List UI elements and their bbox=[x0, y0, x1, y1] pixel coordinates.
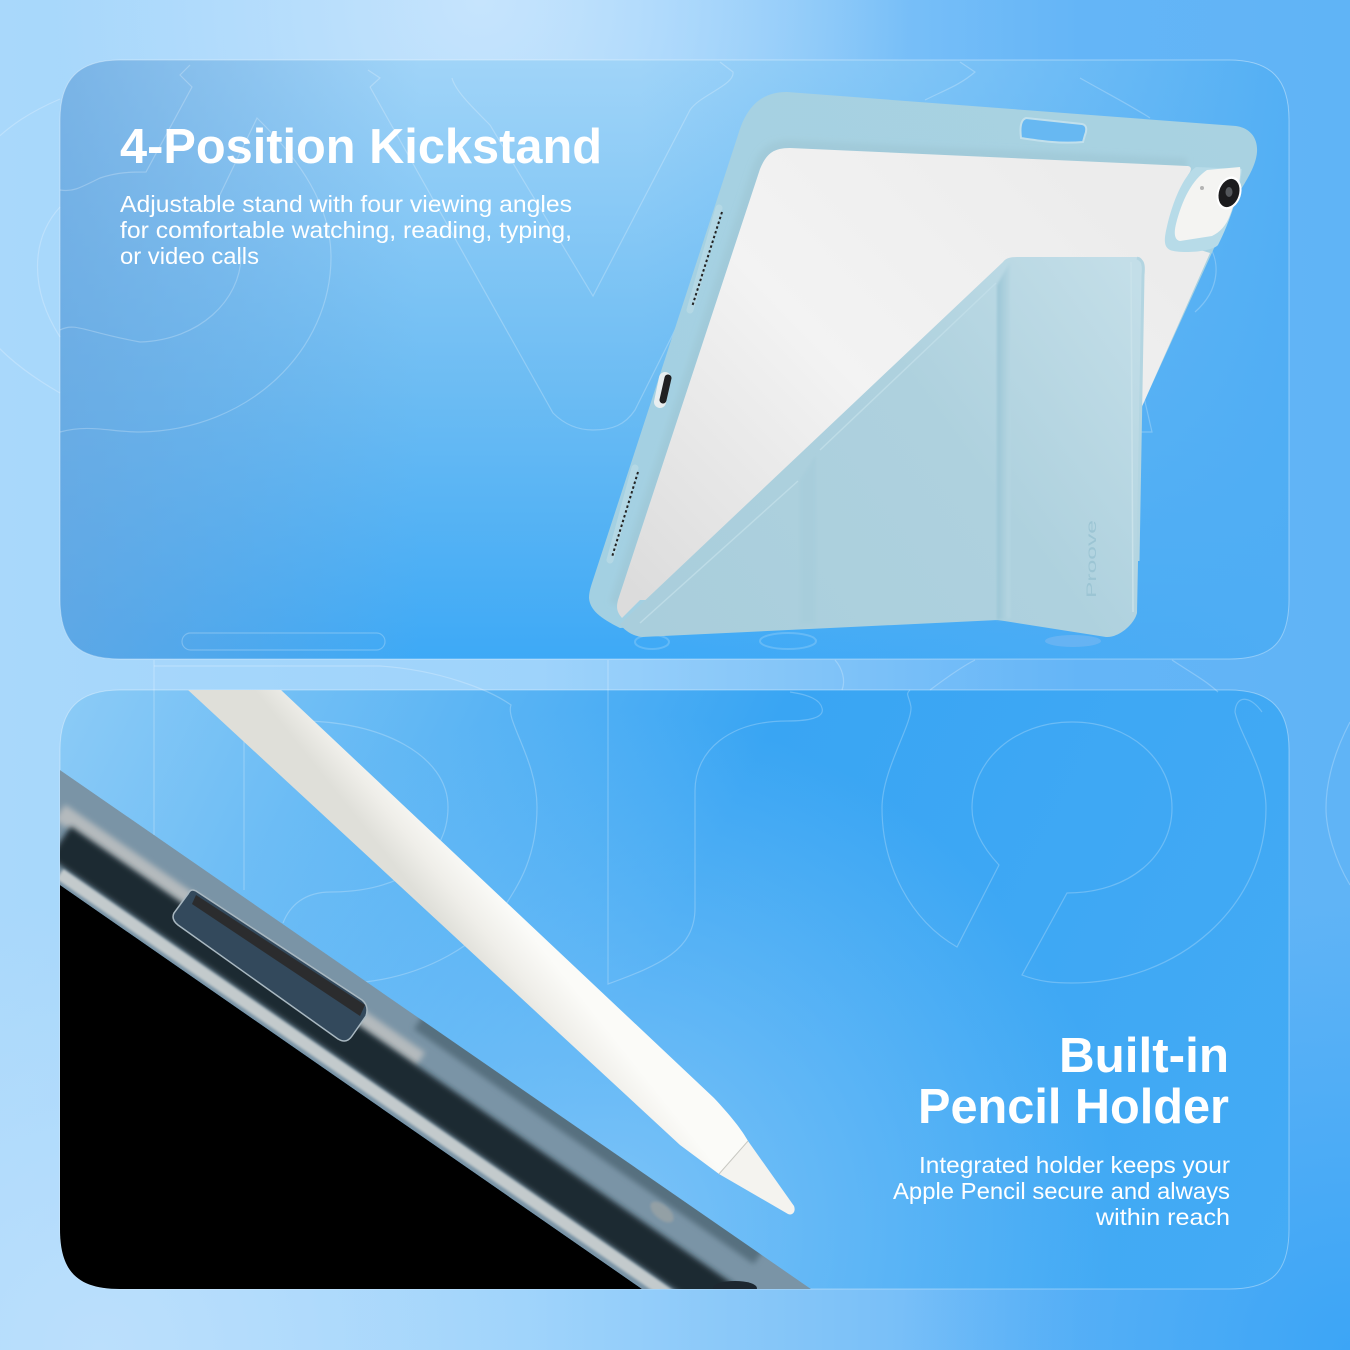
pencil holder description: Apple Pencil secure and always bbox=[893, 1178, 1230, 1204]
pencil holder image bbox=[60, 770, 811, 1289]
panel: pencil holder bbox=[60, 690, 1290, 1290]
pencil holder heading bbox=[918, 1029, 1229, 1134]
apple pencil bbox=[188, 690, 795, 1214]
camera lens bbox=[1212, 173, 1246, 213]
kickstand heading: 4-Position Kickstand bbox=[120, 120, 602, 174]
tablet case with folded kickstand bbox=[589, 92, 1257, 637]
pencil tip bbox=[719, 1141, 795, 1214]
side button bbox=[660, 378, 665, 402]
pencil holder description: Integrated holder keeps your bbox=[919, 1152, 1230, 1178]
pencil holder description bbox=[893, 1152, 1230, 1230]
pencil holder heading: Built-in bbox=[1059, 1029, 1229, 1083]
panel border bbox=[60, 60, 1289, 659]
kickstand fold gutters bbox=[800, 455, 816, 624]
kickstand description bbox=[120, 191, 572, 269]
panel background bbox=[60, 690, 1290, 1290]
pencil holder heading: Pencil Holder bbox=[918, 1080, 1229, 1134]
pencil slot bbox=[1021, 118, 1086, 143]
side speakers bbox=[610, 208, 722, 560]
panel: kickstand bbox=[60, 60, 1290, 660]
camera module bbox=[1165, 167, 1246, 252]
clear back panel bbox=[617, 148, 1210, 618]
folded kickstand bbox=[620, 257, 1143, 637]
kickstand description: or video calls bbox=[120, 243, 259, 269]
black tablet screen bbox=[60, 885, 642, 1300]
panel background bbox=[60, 60, 1290, 660]
background brand letter outlines bbox=[0, 62, 1350, 984]
case connector detail bbox=[650, 1201, 674, 1223]
panel border bbox=[60, 690, 1289, 1289]
holder clip bbox=[173, 890, 367, 1041]
kickstand description: Adjustable stand with four viewing angles bbox=[120, 191, 572, 217]
case frame bbox=[589, 92, 1257, 628]
kickstand description: for comfortable watching, reading, typing, bbox=[120, 217, 572, 243]
pencil holder description: within reach bbox=[1095, 1204, 1230, 1230]
clear case edge band bbox=[60, 770, 811, 1289]
case inner shade bbox=[617, 148, 1187, 605]
kickstand brand mark: Proove bbox=[1083, 520, 1099, 598]
